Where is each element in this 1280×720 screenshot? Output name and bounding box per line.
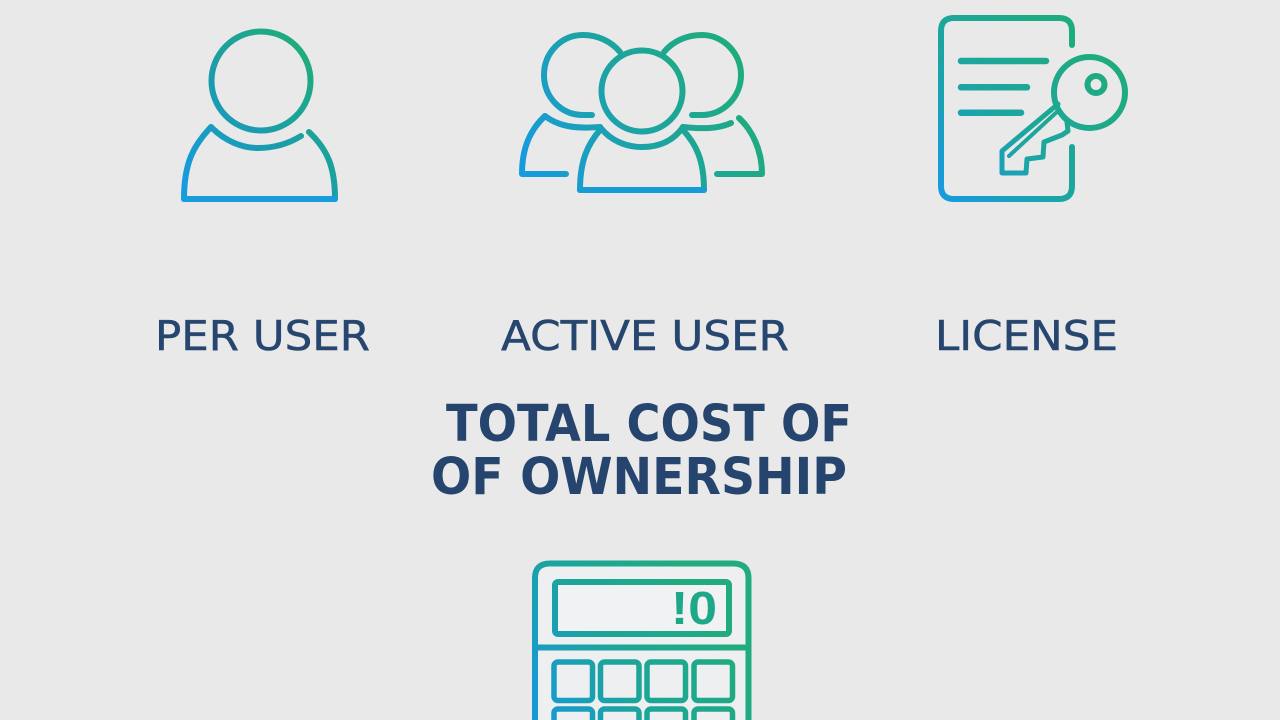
- calculator body: [535, 564, 748, 720]
- calculator display: [555, 582, 729, 634]
- document lines: [961, 61, 1046, 113]
- display digits: !0: [671, 582, 717, 634]
- label: active user: ACTIVE USER: [501, 312, 789, 360]
- key bow: [1054, 57, 1125, 128]
- icon: per user: [184, 32, 335, 199]
- heading: total cost of ownership: OF OWNERSHIP: [431, 448, 847, 507]
- icon: calculator: [535, 564, 748, 720]
- heading: total cost of ownership: [431, 395, 852, 507]
- icon: active user group: [522, 35, 762, 190]
- icon: license document with key: [941, 18, 1125, 199]
- heading: total cost of ownership: TOTAL COST OF: [446, 395, 852, 454]
- label: per user: PER USER: [155, 312, 370, 360]
- calculator keys: [554, 662, 732, 720]
- label: license: LICENSE: [935, 312, 1118, 360]
- document outline: [941, 18, 1072, 199]
- key blade: [1002, 104, 1068, 173]
